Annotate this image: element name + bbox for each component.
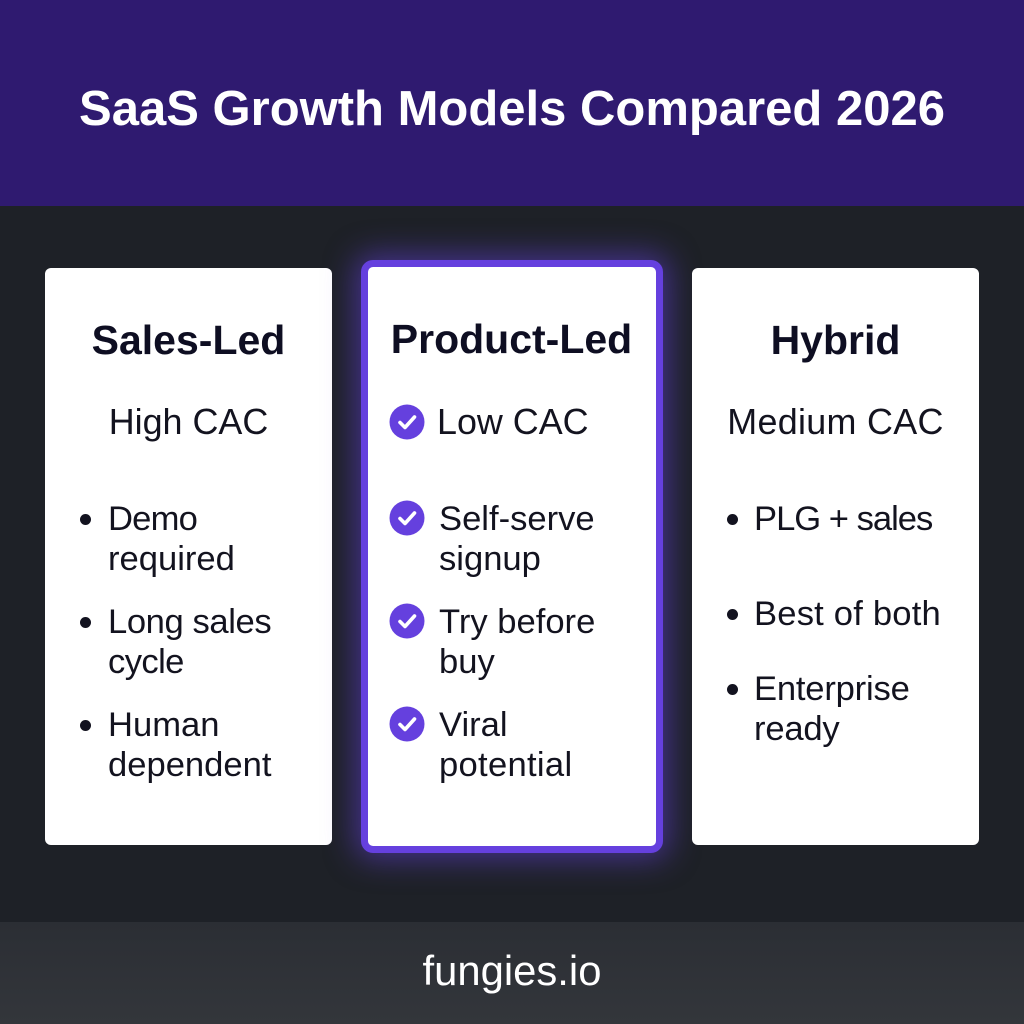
panel: sales-led bbox=[45, 268, 332, 845]
title: SaaS Growth Models Compared 2026 bbox=[79, 82, 945, 136]
bullet list: sales-led: Demo bbox=[108, 500, 197, 538]
panel: product-led highlighted bbox=[361, 260, 663, 853]
bullet list: hybrid: ready bbox=[754, 710, 840, 748]
bullet list: hybrid: PLG + sales bbox=[754, 500, 932, 538]
icon: check bbox=[390, 706, 424, 742]
heading: product-led: Product-Led bbox=[391, 316, 632, 362]
bullet list: hybrid: Enterprise bbox=[754, 670, 910, 708]
CAC: low: Low CAC bbox=[437, 402, 589, 442]
bullet list: sales-led: required bbox=[108, 540, 235, 578]
footer brand: fungies.io bbox=[423, 947, 601, 994]
bullet list: hybrid: Best of both bbox=[754, 595, 941, 633]
heading: hybrid: Hybrid bbox=[771, 317, 900, 363]
icon: check bbox=[390, 404, 424, 440]
check list: product-led: Try before bbox=[439, 603, 595, 641]
bullet list: sales-led: Long sales bbox=[108, 603, 271, 641]
bullet list: sales-led: Human bbox=[108, 706, 219, 744]
CAC: high: High CAC bbox=[109, 402, 268, 442]
check list: product-led: signup bbox=[439, 540, 541, 578]
check list: product-led bbox=[390, 500, 595, 784]
check list: product-led: buy bbox=[439, 643, 495, 681]
check list: product-led: Self-serve bbox=[439, 500, 595, 538]
bullet list: sales-led bbox=[80, 500, 272, 784]
header band bbox=[0, 0, 1024, 206]
check list: product-led: potential bbox=[439, 746, 572, 784]
footer band bbox=[0, 922, 1024, 1024]
bullet list: sales-led: dependent bbox=[108, 746, 271, 784]
bullet list: hybrid bbox=[727, 500, 941, 748]
icon: check bbox=[390, 500, 424, 536]
icon: check bbox=[390, 604, 424, 638]
check list: product-led: Viral bbox=[439, 706, 508, 744]
heading: sales-led: Sales-Led bbox=[92, 317, 285, 363]
panel: hybrid bbox=[692, 268, 979, 845]
CAC: medium: Medium CAC bbox=[727, 402, 944, 442]
bullet list: sales-led: cycle bbox=[108, 643, 184, 681]
